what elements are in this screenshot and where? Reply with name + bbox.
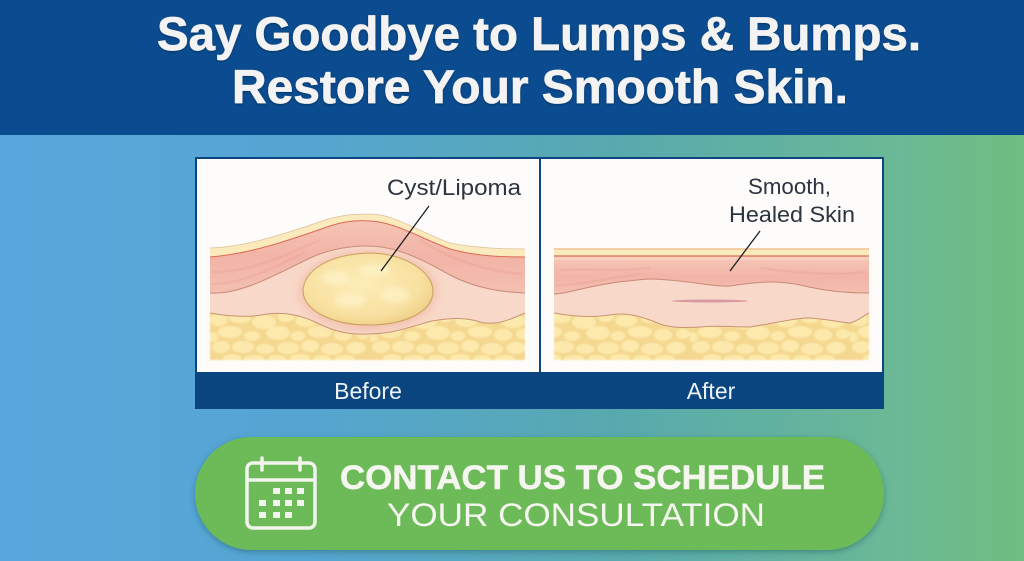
caption: before: Before <box>334 378 402 404</box>
title: Restore Your Smooth Skin. <box>232 60 848 113</box>
call-to-action button <box>195 437 884 550</box>
label: cyst/lipoma: Cyst/Lipoma <box>387 175 522 200</box>
panel: after <box>541 159 882 372</box>
dermis streaks <box>556 268 866 286</box>
cyst / lipoma <box>303 253 433 325</box>
subcutaneous layer <box>210 246 525 334</box>
header banner <box>0 0 1024 135</box>
fat layer <box>210 313 525 360</box>
title: Say Goodbye to Lumps & Bumps. <box>157 7 921 60</box>
epidermis layer <box>554 248 869 256</box>
comparison panel frame <box>195 157 884 409</box>
leader line <box>381 206 429 271</box>
caption: after: After <box>687 378 736 404</box>
icon: calendar <box>247 458 315 528</box>
epidermis layer <box>210 214 525 257</box>
cta text: CONTACT US TO SCHEDULE <box>340 459 825 497</box>
title <box>157 7 921 113</box>
dermis streaks <box>212 240 523 284</box>
leader line <box>730 231 760 271</box>
subcutaneous layer <box>554 279 869 327</box>
label: smooth, healed skin: Smooth, <box>748 174 831 199</box>
cyst mottling <box>321 264 409 307</box>
panel: before <box>197 159 539 372</box>
cta text: YOUR CONSULTATION <box>387 497 765 533</box>
dermis layer <box>210 221 525 293</box>
cyst halo <box>300 252 436 330</box>
label: smooth, healed skin: Healed Skin <box>729 202 855 227</box>
scar <box>672 300 748 302</box>
cta text <box>340 459 825 533</box>
dermis layer <box>554 260 869 294</box>
fat layer <box>554 313 869 360</box>
